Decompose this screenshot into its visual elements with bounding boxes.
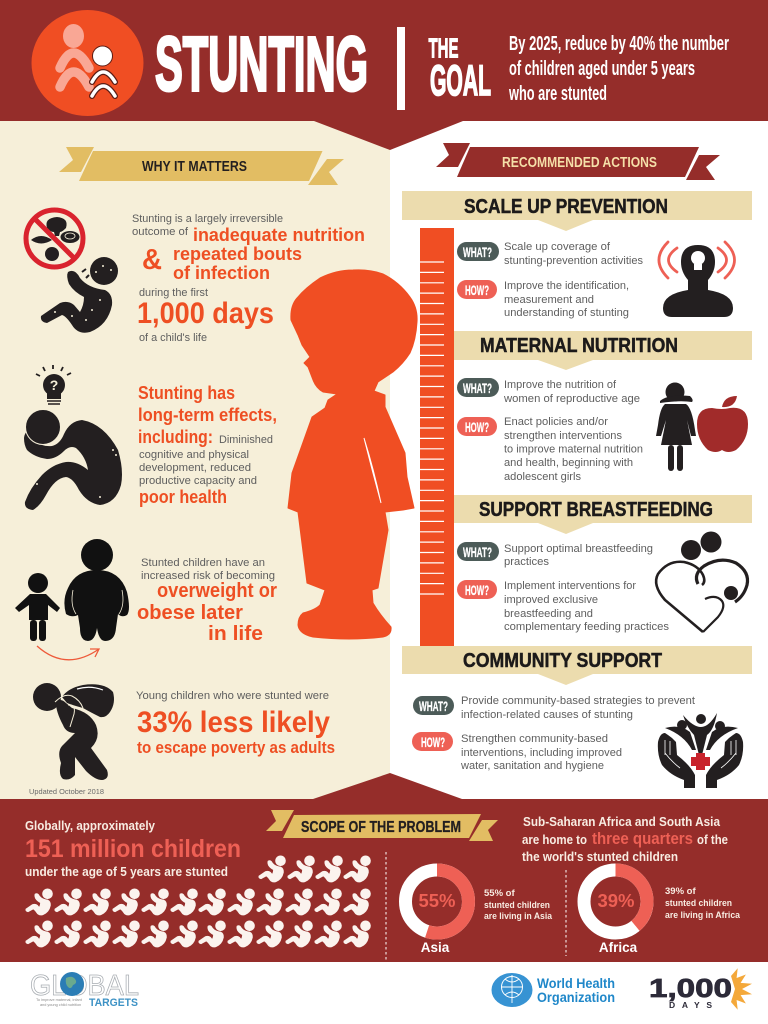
page backgrounds xyxy=(0,121,768,801)
text: inadequate nutrition: 1,000 days xyxy=(137,297,274,330)
text: Asia note: stunted children xyxy=(484,900,550,911)
ribbon: scope of the problem: SCOPE OF THE PROBLEM xyxy=(301,819,461,836)
icon: figure carrying sack xyxy=(33,683,114,780)
breastfeeding: what: Support optimal breastfeeding xyxy=(504,543,653,555)
donut chart: Asia 55%: 55% xyxy=(418,890,456,911)
text: inadequate nutrition: outcome of xyxy=(132,226,189,238)
ribbon: scope of the problem xyxy=(266,810,498,841)
icon: hungry baby xyxy=(41,257,118,333)
text: three quarters: are home to xyxy=(522,832,587,847)
icon: hands with community and cross xyxy=(658,713,743,788)
donut chart: Asia 55%: Asia xyxy=(421,940,450,955)
text: overweight or obese: overweight or xyxy=(157,580,277,602)
icon: head with lightbulb xyxy=(659,242,734,317)
community: how: interventions, including improved xyxy=(461,747,622,759)
logo: Global Targets 2025: and young child nutrition xyxy=(40,1003,81,1007)
ribbon: recommended actions: RECOMMENDED ACTIONS xyxy=(502,155,657,171)
logo: 1,000 days: 1,000 xyxy=(649,973,732,1003)
header band: GOAL xyxy=(430,57,491,105)
ribbon: why it matters xyxy=(59,147,344,185)
breastfeeding: how xyxy=(457,580,670,633)
logo: 1,000 days: DAYS xyxy=(669,1000,712,1010)
ribbon: why it matters: WHY IT MATTERS xyxy=(142,159,247,175)
title: STUNTING xyxy=(155,22,368,108)
text: Asia note: 55% of xyxy=(484,888,515,899)
icon: lightbulb question: ? xyxy=(50,377,58,393)
community: how: water, sanitation and hygiene xyxy=(460,760,604,772)
maternal: how: strengthen interventions xyxy=(504,430,622,442)
logo: World Health Organization: Organization xyxy=(537,989,615,1005)
maternal: what: WHAT? xyxy=(463,380,492,396)
scale up: how: Improve the identification, xyxy=(504,280,629,292)
maternal: what xyxy=(457,378,640,405)
maternal: how: Enact policies and/or xyxy=(504,416,608,428)
scale up: how: understanding of stunting xyxy=(504,307,629,319)
text: escape poverty: 33% less likely xyxy=(137,706,330,739)
text: overweight or obese: increased risk of becoming xyxy=(141,570,275,582)
scale up: how: HOW? xyxy=(465,282,489,298)
section bar: support breastfeeding: SUPPORT BREASTFEEDING xyxy=(479,499,713,521)
text: long-term effects: Stunting has xyxy=(138,383,235,403)
text: inadequate nutrition: of infection xyxy=(173,262,270,283)
breastfeeding: how: Implement interventions for xyxy=(504,580,636,592)
text: long-term effects: development, reduced xyxy=(139,462,251,474)
the goal label: THE xyxy=(428,32,458,64)
text: inadequate nutrition: Stunting is a largely irreversible xyxy=(132,213,283,225)
text: three quarters: three quarters xyxy=(592,829,693,848)
text: long-term effects: Diminished xyxy=(219,434,273,446)
breastfeeding: how: complementary feeding practices xyxy=(504,621,670,633)
section bar: community support xyxy=(402,646,752,685)
ribbon: recommended actions xyxy=(436,143,720,180)
text: long-term effects: long-term effects, xyxy=(138,405,277,425)
text: three quarters xyxy=(522,814,728,864)
text: inadequate nutrition: & xyxy=(142,244,162,276)
text: Africa note: 39% of xyxy=(665,886,696,897)
text: overweight or obese: in life xyxy=(208,623,263,645)
text: escape poverty: Young children who were stunted were xyxy=(136,690,329,702)
community: what: Provide community-based strategies to prevent xyxy=(461,695,695,707)
icon: girl xyxy=(656,382,696,471)
donut chart: Asia 55% xyxy=(406,870,468,955)
text: three quarters: Sub-Saharan Africa and South Asia xyxy=(523,814,721,829)
breastfeeding: how: HOW? xyxy=(465,582,489,598)
section bar: scale up prevention xyxy=(402,191,752,231)
community: how xyxy=(412,732,622,772)
breastfeeding: what: WHAT? xyxy=(463,544,492,560)
text: long-term effects: cognitive and physical xyxy=(139,449,249,461)
text: three quarters: of the xyxy=(697,832,728,847)
donut chart: Africa 39%: 39% xyxy=(597,890,635,911)
community: how: Strengthen community-based xyxy=(461,733,608,745)
section bar: community support: COMMUNITY SUPPORT xyxy=(463,650,662,672)
text: overweight or obese: obese later xyxy=(137,602,243,624)
maternal: how: HOW? xyxy=(465,419,489,435)
text: long-term effects: productive capacity and xyxy=(139,475,257,487)
main child silhouette xyxy=(288,270,417,639)
logo: Global Targets 2025: To improve maternal, infant xyxy=(36,998,83,1002)
icon: heart with mother and baby xyxy=(656,532,748,632)
text: inadequate nutrition: repeated bouts xyxy=(173,243,302,264)
maternal: how: to improve maternal nutrition xyxy=(504,444,643,456)
donut chart: Africa 39%: Africa xyxy=(599,940,638,955)
arrow xyxy=(37,646,99,660)
section bar: scale up prevention: SCALE UP PREVENTION xyxy=(464,196,668,218)
section bar: maternal nutrition xyxy=(454,331,752,370)
height ruler xyxy=(420,228,454,646)
community: how: HOW? xyxy=(421,734,445,750)
scale up: how: measurement and xyxy=(504,294,594,306)
goal statement: who are stunted xyxy=(508,83,607,105)
text: overweight or obese xyxy=(137,557,277,645)
section bar: maternal nutrition: MATERNAL NUTRITION xyxy=(480,335,678,357)
icon: no food sign xyxy=(26,210,83,267)
text: escape poverty xyxy=(136,690,335,757)
breastfeeding: how: improved exclusive xyxy=(504,594,598,606)
scale up: how xyxy=(457,280,629,319)
text: 151 million children xyxy=(25,818,241,879)
maternal: what: Improve the nutrition of xyxy=(504,379,617,391)
text: Africa note xyxy=(665,886,741,921)
text: long-term effects xyxy=(138,383,277,507)
logo: World Health Organization xyxy=(492,973,615,1007)
maternal: what: women of reproductive age xyxy=(503,393,640,405)
maternal: how xyxy=(457,416,643,483)
text: Africa note: are living in Africa xyxy=(665,910,741,921)
scale up: what xyxy=(457,241,643,267)
logo: Global Targets 2025: TARGETS xyxy=(89,997,138,1009)
goal statement xyxy=(508,33,729,105)
text: 151 million children: 151 million children xyxy=(25,835,241,863)
scale up: what: stunting-prevention activities xyxy=(504,255,643,267)
donut chart: Africa 39% xyxy=(584,870,647,955)
the goal label xyxy=(428,32,491,105)
icon: small child to large child xyxy=(15,539,129,660)
section bar: support breastfeeding xyxy=(454,495,752,534)
text: 151 million children: under the age of 5 years are stunted xyxy=(25,865,228,879)
breastfeeding: what: practices xyxy=(504,556,549,568)
community: what xyxy=(413,695,695,721)
text: three quarters: the world's stunted children xyxy=(522,849,678,864)
scale up: what: Scale up coverage of xyxy=(504,241,611,253)
maternal: how: adolescent girls xyxy=(504,471,581,483)
text: update date: Updated October 2018 xyxy=(29,787,104,796)
icon: lightbulb question xyxy=(36,365,71,404)
logo: adult and child xyxy=(32,10,144,116)
breastfeeding: how: breastfeeding and xyxy=(504,608,593,620)
text: inadequate nutrition: inadequate nutrition xyxy=(193,224,365,245)
text: 151 million children: Globally, approximately xyxy=(25,818,156,833)
scale up: what: WHAT? xyxy=(463,244,492,260)
header band xyxy=(0,0,768,150)
text: Africa note: stunted children xyxy=(665,898,732,909)
text: long-term effects: including: xyxy=(138,427,213,447)
breastfeeding: what xyxy=(457,542,653,568)
text: inadequate nutrition xyxy=(132,213,365,344)
text: inadequate nutrition: of a child's life xyxy=(139,332,207,344)
logo: 1,000 days xyxy=(649,968,752,1010)
baby pictogram grid xyxy=(26,856,370,947)
text: overweight or obese: Stunted children have an xyxy=(141,557,265,569)
icon: apple xyxy=(697,396,748,452)
logo: World Health Organization: World Health xyxy=(537,975,615,991)
logo: Global Targets 2025: GLOBAL xyxy=(30,970,139,1002)
icon: crouched figure xyxy=(24,410,122,510)
bottom band xyxy=(0,773,768,962)
text: long-term effects: poor health xyxy=(139,487,227,507)
community: what: WHAT? xyxy=(419,698,448,714)
text: escape poverty: to escape poverty as adults xyxy=(137,739,335,757)
maternal: how: and health, beginning with xyxy=(504,457,633,469)
community: what: infection-related causes of stunting xyxy=(461,709,633,721)
text: Asia note: are living in Asia xyxy=(484,911,553,922)
text: Asia note xyxy=(484,888,553,922)
text: inadequate nutrition: during the first xyxy=(139,287,208,299)
